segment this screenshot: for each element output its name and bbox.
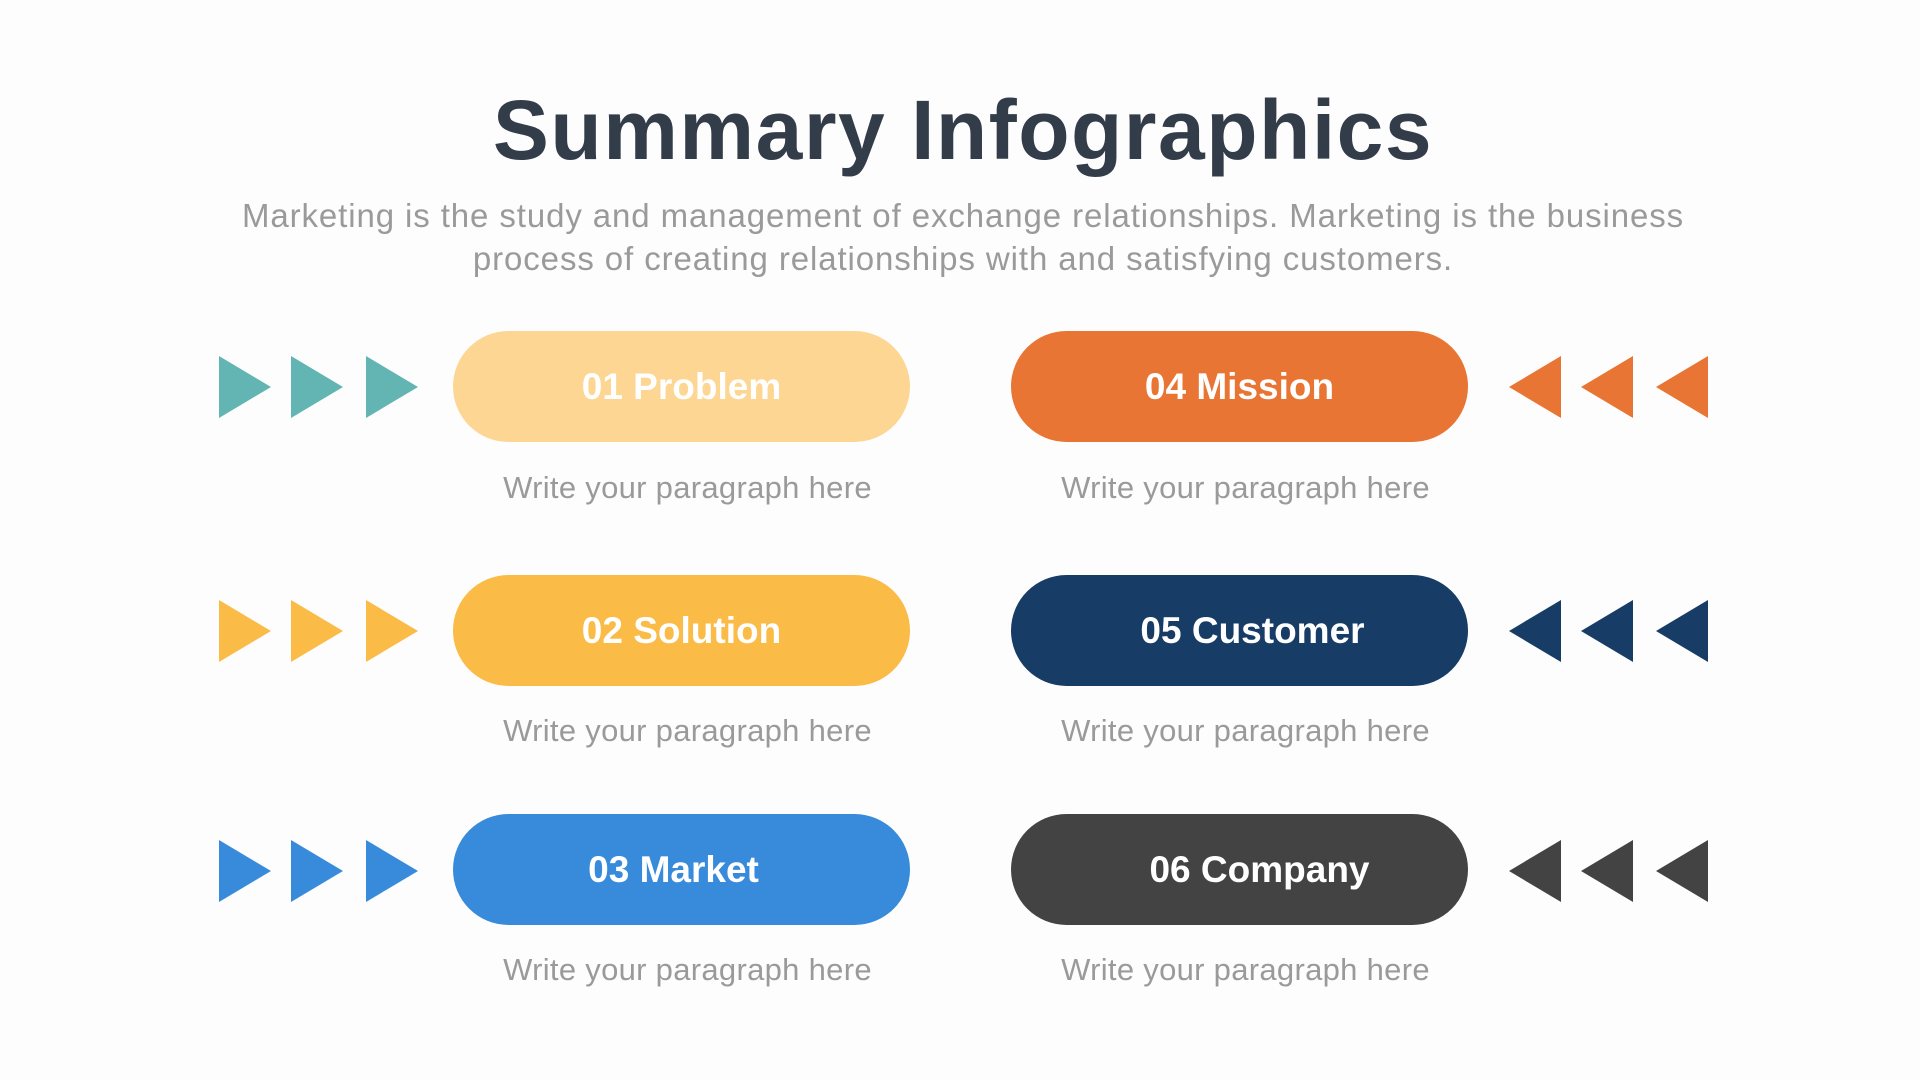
text 03: Write your paragraph here [503, 952, 872, 987]
text 04: Write your paragraph here [1061, 470, 1430, 505]
pill: 02 Solution [453, 575, 910, 686]
pill: 03 Market [453, 814, 910, 925]
subtitle: Marketing is the study and management of exchange relationships. Marketing is the business [242, 197, 1684, 234]
text 02: Write your paragraph here [503, 713, 872, 748]
text 01: Write your paragraph here [503, 470, 872, 505]
title: Summary Infographics [493, 83, 1433, 177]
pill: 03 Market: 03 Market [588, 848, 759, 890]
pill: 06 Company [1011, 814, 1468, 925]
pill: 01 Problem: 01 Problem [582, 366, 781, 406]
subtitle: process of creating relationships with and satisfying customers. [473, 240, 1453, 277]
pill: 06 Company: 06 Company [1149, 848, 1370, 890]
text 06: Write your paragraph here [1061, 952, 1430, 987]
pill: 02 Solution: 02 Solution [582, 610, 781, 650]
subtitle [242, 197, 1684, 277]
pill: 04 Mission [1011, 331, 1468, 442]
text 05: Write your paragraph here [1061, 713, 1430, 748]
pill: 05 Customer [1011, 575, 1468, 686]
pill: 01 Problem [453, 331, 910, 442]
pill: 05 Customer: 05 Customer [1140, 610, 1365, 650]
pill: 04 Mission: 04 Mission [1145, 366, 1334, 406]
